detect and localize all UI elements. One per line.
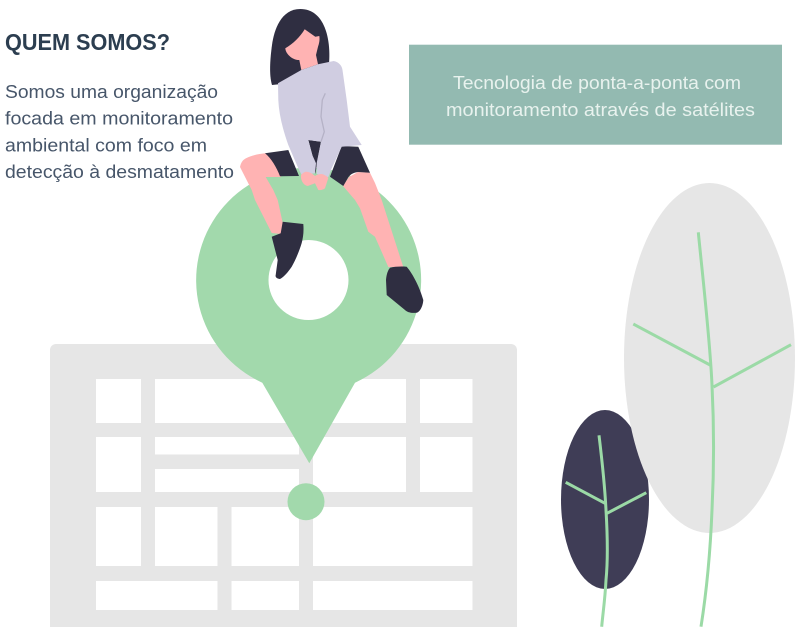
right leg xyxy=(343,172,403,267)
icon: large leaf veins xyxy=(633,232,791,627)
callout: technology: Tecnologia de ponta-a-ponta com xyxy=(453,73,741,93)
callout: technology xyxy=(409,45,782,145)
sweater xyxy=(278,61,362,177)
icon: pin location dot xyxy=(288,483,324,520)
text block: who we are: ambiental com foco em xyxy=(5,136,207,156)
icon: small leaf veins xyxy=(566,435,646,627)
shorts xyxy=(265,140,370,186)
icon: small dark leaf xyxy=(561,410,649,589)
icon: location pin xyxy=(196,168,421,463)
face and neck xyxy=(285,29,320,70)
heading: QUEM SOMOS? xyxy=(5,29,170,55)
hands xyxy=(301,172,328,190)
illustration: seated woman xyxy=(240,9,423,313)
text block: who we are xyxy=(5,82,234,182)
right shoe xyxy=(386,267,423,313)
callout: technology: monitoramento através de satélites xyxy=(446,100,755,120)
sleeve fold xyxy=(321,93,325,142)
left shoe xyxy=(272,222,304,279)
left leg xyxy=(240,153,283,234)
hair xyxy=(270,9,329,85)
icon: large grey leaf xyxy=(624,183,795,533)
text block: who we are: Somos uma organização xyxy=(5,82,218,102)
text block: who we are: focada em monitoramento xyxy=(5,108,233,128)
panel: map grid xyxy=(50,344,517,627)
text block: who we are: detecção à desmatamento xyxy=(5,162,234,182)
